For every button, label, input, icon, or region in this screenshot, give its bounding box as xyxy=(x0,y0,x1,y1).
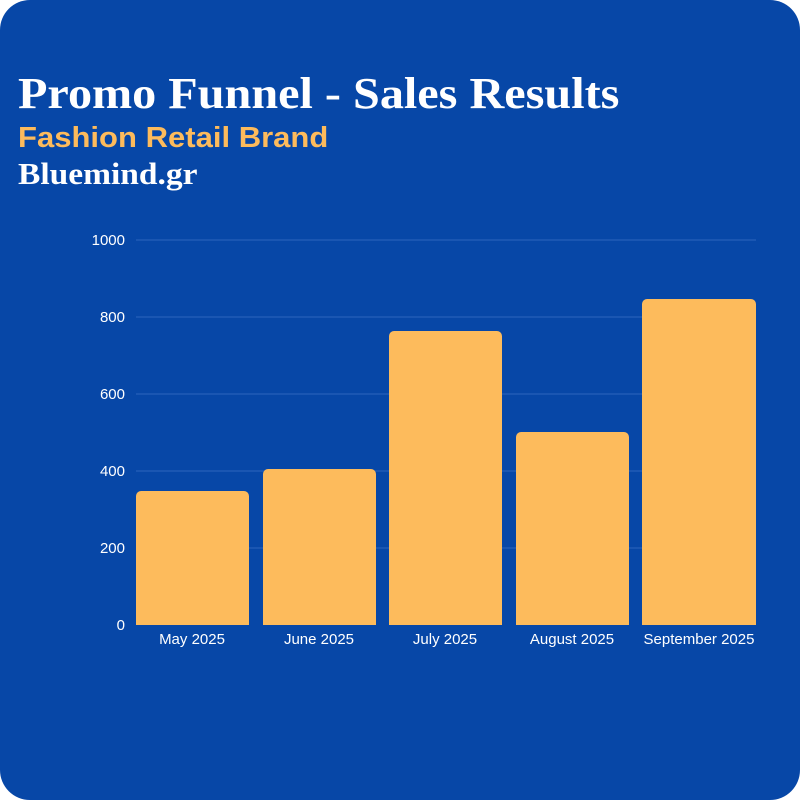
x axis labels: September 2025 xyxy=(644,631,754,648)
subtitle: Fashion Retail Brand xyxy=(18,122,328,154)
brand name: Bluemind.gr xyxy=(18,156,198,191)
x axis labels: June 2025 xyxy=(284,631,354,648)
y axis labels: 1000 xyxy=(92,232,125,249)
y axis labels: 0 xyxy=(117,617,125,634)
x axis labels: July 2025 xyxy=(413,631,477,648)
x axis labels xyxy=(159,631,754,648)
y axis labels: 400 xyxy=(100,463,125,480)
bars xyxy=(136,299,756,625)
x axis labels: August 2025 xyxy=(530,631,614,648)
y axis labels: 600 xyxy=(100,386,125,403)
y axis labels xyxy=(92,232,125,634)
y axis labels: 200 xyxy=(100,540,125,557)
title: Promo Funnel - Sales Results xyxy=(18,69,619,118)
y axis labels: 800 xyxy=(100,309,125,326)
x axis labels: May 2025 xyxy=(159,631,225,648)
